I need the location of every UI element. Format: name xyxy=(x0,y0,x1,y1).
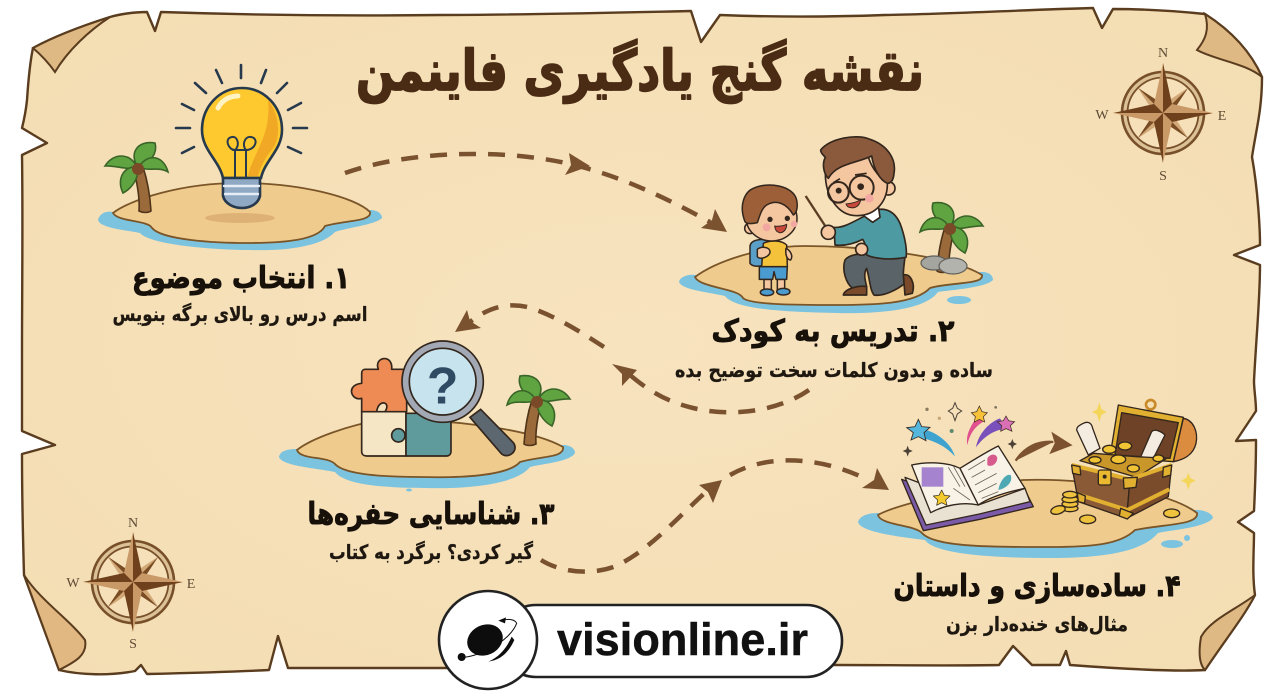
step 2 label: ساده و بدون کلمات سخت توضیح بده xyxy=(675,358,993,382)
step 1 label xyxy=(112,261,368,326)
step 1 label: ۱. انتخاب موضوع xyxy=(132,261,350,296)
step 4 label xyxy=(894,569,1180,636)
compass: bottom left: W xyxy=(66,576,80,591)
curved arrow xyxy=(1016,434,1070,461)
title: نقشه گنج یادگیری فاینمن xyxy=(356,39,924,104)
compass: bottom left: E xyxy=(187,577,195,592)
step 2 label: ۲. تدریس به کودک xyxy=(712,314,954,349)
palm tree xyxy=(105,143,168,212)
step 4 label: ۴. ساده‌سازی و داستان xyxy=(894,569,1180,604)
puzzle xyxy=(352,359,451,456)
magnifier xyxy=(402,341,515,456)
compass: top right: E xyxy=(1218,109,1226,124)
island 1: lightbulb xyxy=(98,65,382,250)
compass: top right xyxy=(1095,46,1226,184)
open book xyxy=(902,446,1033,531)
step 3 label: ۳. شناسایی حفره‌ها xyxy=(308,497,554,532)
magnifier: ? xyxy=(427,356,458,414)
curl: bottom left xyxy=(24,575,85,670)
compass: top right: W xyxy=(1095,108,1109,123)
dashed path: step 2 to step 3 and back to step 1 xyxy=(455,305,809,412)
curl: top right xyxy=(1197,14,1262,77)
planet logo xyxy=(458,617,517,662)
island 3: puzzle and magnifier xyxy=(279,341,575,492)
compass: bottom left xyxy=(66,516,195,652)
compass: bottom left: S xyxy=(129,637,137,652)
compass: top right: N xyxy=(1158,46,1168,61)
shooting stars and sparkles xyxy=(903,403,1017,457)
pill xyxy=(500,605,842,677)
curl: bottom right xyxy=(1200,595,1255,670)
treasure chest xyxy=(1072,400,1197,519)
palm tree xyxy=(507,376,570,446)
island 2: teacher and child xyxy=(679,137,993,313)
palm tree and rocks xyxy=(920,203,983,274)
curl: top left xyxy=(33,17,110,72)
island 4: book and treasure chest xyxy=(858,400,1213,558)
step 2 label xyxy=(675,314,993,382)
gold coins xyxy=(1050,491,1180,524)
icon: lightbulb xyxy=(176,65,307,208)
yellow sparkles xyxy=(1092,403,1196,490)
compass: bottom left: N xyxy=(128,516,138,531)
step 4 label: مثال‌های خنده‌دار بزن xyxy=(946,612,1128,636)
logo badge: visionline.ir xyxy=(439,591,842,689)
step 1 label: اسم درس رو بالای برگه بنویس xyxy=(112,302,368,326)
step 3 label: گیر کردی؟ برگرد به کتاب xyxy=(329,540,533,564)
dashed path: step 1 to step 2 xyxy=(345,153,727,232)
dashed path: step 3 to step 4 xyxy=(541,460,889,572)
step 3 label xyxy=(308,497,554,564)
website text: visionline.ir xyxy=(557,614,808,665)
child figure xyxy=(742,185,797,296)
compass: top right: S xyxy=(1159,169,1167,184)
teacher figure xyxy=(806,137,913,295)
logo circle xyxy=(439,591,537,689)
